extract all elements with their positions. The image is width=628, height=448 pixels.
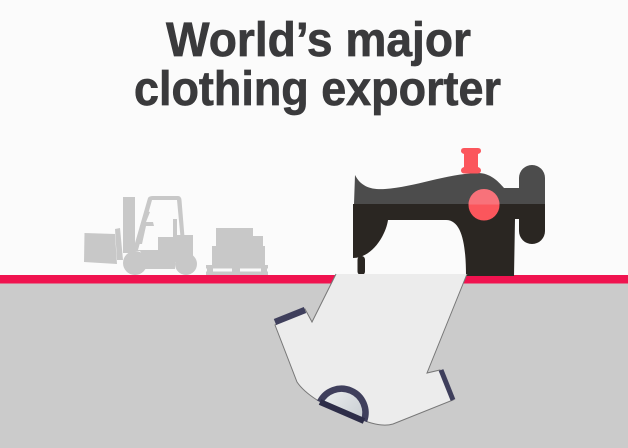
ground: red line bbox=[0, 275, 628, 284]
icon: pallet with boxes bbox=[206, 228, 268, 275]
ground: grey floor bbox=[0, 283, 628, 448]
pocket bbox=[320, 389, 365, 421]
title: clothing exporter bbox=[134, 63, 501, 116]
needle bbox=[358, 256, 365, 275]
fabric shirt piece bbox=[275, 274, 467, 425]
thread spool bbox=[461, 148, 481, 174]
title: World’s major bbox=[166, 14, 471, 67]
machine lower body bbox=[353, 204, 545, 276]
fabric bbox=[275, 274, 467, 425]
fabric outline bbox=[275, 274, 467, 425]
icon: sewing machine bbox=[353, 148, 545, 276]
title bbox=[134, 14, 501, 116]
right cuff bbox=[441, 370, 453, 400]
left cuff bbox=[275, 310, 305, 322]
icon: forklift bbox=[84, 196, 197, 275]
hand wheel bbox=[468, 189, 500, 220]
machine upper body bbox=[354, 165, 545, 204]
